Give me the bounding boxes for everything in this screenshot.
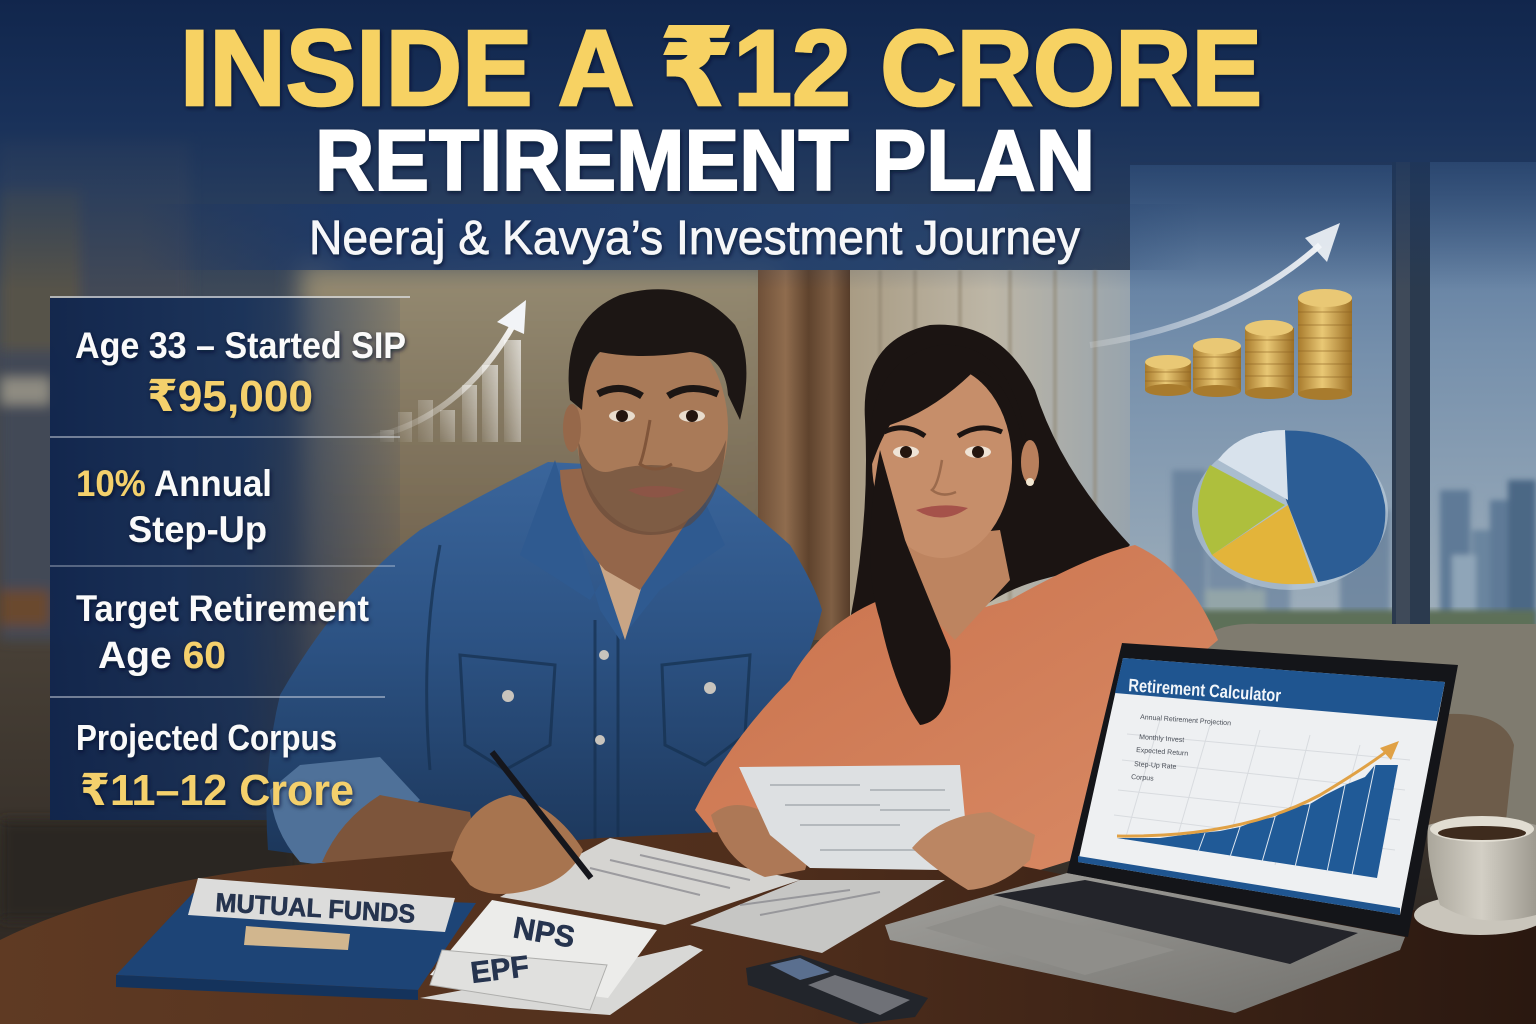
man rolled sleeve: [270, 757, 420, 868]
top dark band: [0, 0, 1536, 290]
laptop trackpad: [925, 905, 1175, 975]
brown curtain: [758, 270, 850, 640]
man buttons: [502, 650, 716, 745]
pen: [492, 752, 591, 878]
document: main sheet: [500, 838, 800, 925]
table: [0, 830, 1536, 1024]
screen title: Retirement Calculator: [1128, 675, 1282, 706]
laptop screen: [1078, 658, 1445, 915]
screen small text: Corpus: [1131, 774, 1154, 783]
woman's left hand: [711, 805, 813, 877]
woman hair back: [850, 325, 1130, 728]
coin stack 3: [1245, 320, 1294, 399]
left panel backdrop: [50, 298, 400, 820]
screen footer strip: [1078, 856, 1400, 915]
stat: annual step-up: Step-Up: [128, 509, 267, 550]
man shirt shading: [427, 545, 750, 850]
screen bars: [1117, 765, 1398, 878]
subtitle band: [140, 204, 1200, 270]
papers: NPS and EPF: [420, 900, 703, 1015]
stat: started SIP: Age 33 – Started SIP: [75, 325, 406, 366]
growth arrow over window: [1090, 223, 1340, 345]
man torso and arms: [266, 462, 822, 870]
label: NPS: NPS: [511, 911, 577, 955]
woman hair front: [869, 345, 1030, 470]
person: man in denim shirt: [266, 289, 822, 873]
stat: target retirement: Age 60: [98, 635, 226, 677]
screen small text: Expected Return: [1136, 747, 1188, 758]
pie slice: blue: [1260, 431, 1385, 582]
calculator: [746, 955, 928, 1024]
man neck: [560, 460, 695, 590]
label: mutual funds: [188, 878, 455, 932]
pie chart: [1192, 430, 1388, 590]
coin stack 4: [1298, 289, 1352, 400]
coin stack 1: [1145, 355, 1191, 396]
stat: target retirement: Target Retirement: [76, 588, 369, 629]
back wall behind couple: [300, 260, 780, 680]
man eyes and mouth: [598, 388, 718, 498]
man ear: [563, 404, 581, 452]
document: lower sheet: [690, 880, 945, 953]
laptop base: [885, 873, 1405, 1013]
stat: projected corpus: [76, 717, 354, 815]
stat: annual step-up: 10% Annual: [76, 463, 272, 504]
coin stack 2: [1193, 338, 1241, 397]
stat: projected corpus: ₹11–12 Crore: [80, 766, 354, 815]
window: [1130, 130, 1536, 650]
screen growth curve: [1117, 745, 1395, 836]
screen grid: [1114, 720, 1410, 870]
screen small text: Step-Up Rate: [1134, 761, 1177, 771]
title line 1: INSIDE A ₹12 CRORE: [180, 7, 1262, 128]
screen small text: Monthly Invest: [1139, 734, 1184, 744]
laptop: [885, 643, 1458, 1013]
man forearm: [322, 795, 480, 873]
title line 2: RETIREMENT PLAN: [315, 113, 1095, 209]
woman face: [872, 366, 1012, 558]
sofa: [1200, 624, 1536, 830]
man hair: [569, 289, 746, 420]
woman ear and earring: [1021, 440, 1039, 484]
city skyline: [1172, 470, 1536, 630]
woman eyes and mouth: [884, 428, 1002, 518]
person: woman in orange blouse: [695, 325, 1218, 870]
label: mutual funds: MUTUAL FUNDS: [215, 887, 416, 929]
coffee cup: [1414, 816, 1536, 935]
screen header: [1115, 658, 1445, 721]
man collar: [520, 460, 725, 640]
stat: target retirement: [76, 588, 369, 677]
left info panel: [50, 297, 526, 815]
folder clasp: [244, 926, 350, 950]
window frame: [1392, 130, 1430, 650]
sheer curtain: [850, 270, 1130, 640]
woman's right hand: [912, 812, 1035, 890]
screen small text: [1131, 714, 1231, 783]
stat: annual step-up: [76, 463, 272, 550]
laptop lid: [1067, 643, 1458, 937]
paper held by woman: [739, 765, 1035, 890]
stat: projected corpus: Projected Corpus: [76, 717, 337, 758]
left room shelves: [0, 140, 300, 920]
stat: started SIP: [75, 325, 406, 421]
pie slice: yellow: [1212, 505, 1315, 584]
folder: mutual funds: [116, 878, 476, 1000]
subtitle: Neeraj & Kavya’s Investment Journey: [309, 212, 1080, 265]
pie slice: pale: [1218, 430, 1288, 500]
panel icon: rising bars: [368, 300, 526, 442]
man beard: [578, 440, 726, 535]
screen small text: Annual Retirement Projection: [1140, 714, 1231, 727]
coins: [1145, 289, 1352, 400]
woman blouse: [695, 545, 1218, 870]
man face: [576, 324, 728, 532]
laptop keyboard: [993, 880, 1358, 964]
woman neck: [905, 530, 1010, 640]
label: EPF: EPF: [469, 950, 531, 990]
hand holding pen: [451, 752, 591, 894]
panel: dividers: [50, 297, 410, 697]
pie slice: green: [1198, 465, 1285, 555]
paperwork on table: [500, 838, 945, 953]
stat: started SIP: ₹95,000: [147, 372, 313, 421]
